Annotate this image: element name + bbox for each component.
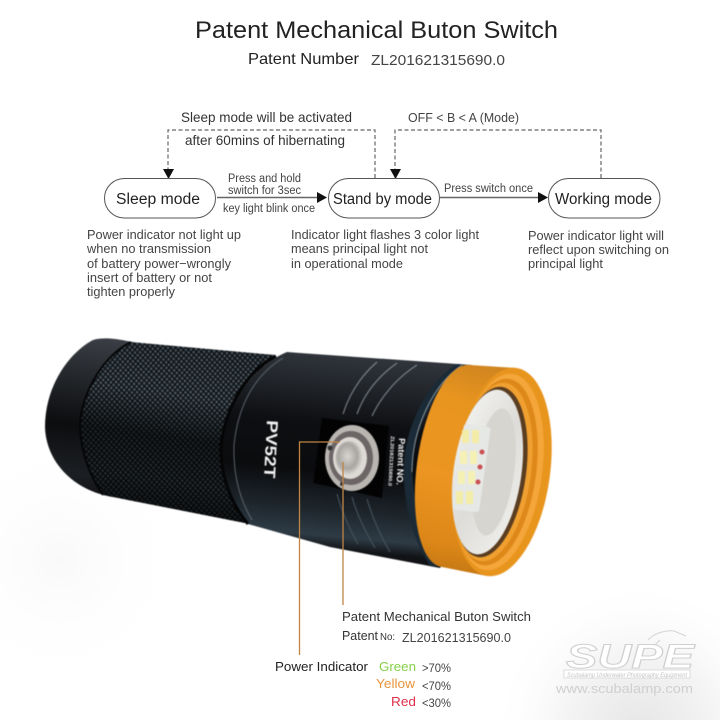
leader line: power indicator: [300, 442, 340, 655]
patent callout text: [342, 609, 531, 645]
text: stand by mode description: means principal light not: [291, 241, 428, 256]
arrow: sleep to stand by: [217, 173, 327, 215]
watermark logo: Scubalamp Underwater Photography Equipment: [567, 673, 687, 679]
patent label on body: Patent NO.: [395, 438, 407, 485]
patent callout text: Patent Mechanical Buton Switch: [342, 609, 531, 624]
mechanical button switch: [325, 425, 379, 491]
flashlight photo illustration: [45, 338, 564, 583]
text: sleep mode description: [86, 227, 241, 299]
sleep activation loop: Sleep mode will be activated: [181, 109, 352, 125]
patent number heading: [248, 51, 505, 69]
patent callout text: Patent: [342, 629, 379, 643]
power indicator legend: Red: [391, 694, 416, 709]
power indicator legend: >70%: [422, 663, 451, 675]
leader line: button switch: [342, 462, 344, 605]
tail cap: [45, 338, 140, 497]
patent number heading: Patent Number: [248, 51, 360, 68]
text: sleep mode description: of battery power−wrongly: [87, 256, 231, 271]
sleep activation loop: after 60mins of hibernating: [185, 132, 345, 148]
text: working mode description: principal light: [528, 256, 603, 271]
text: sleep mode description: tighten properly: [87, 284, 175, 299]
arrow: stand by to working: Press switch once: [444, 183, 533, 195]
watermark logo: SUPE: [566, 638, 696, 676]
text: stand by mode description: in operational mode: [291, 256, 403, 271]
patent callout text: No:: [380, 631, 395, 643]
text: working mode description: [528, 228, 669, 271]
title: Patent Mechanical Buton Switch: [195, 17, 558, 44]
sleep mode pill: Sleep mode: [116, 191, 200, 208]
arrow: sleep to stand by: switch for 3sec: [228, 185, 301, 197]
main body tube: [221, 352, 500, 568]
text: sleep mode description: when no transmission: [86, 241, 211, 256]
knurled grip: [80, 342, 275, 524]
arrow: stand by to working: [440, 183, 548, 203]
power indicator legend: [275, 659, 451, 710]
text: working mode description: Power indicator light will: [528, 228, 664, 243]
power indicator legend: <30%: [422, 698, 451, 710]
mode cycle loop: OFF < B < A (Mode): [408, 110, 519, 125]
patent callout text: ZL201621315690.0: [402, 630, 511, 645]
power indicator legend: Yellow: [376, 676, 416, 691]
stand by mode pill: Stand by mode: [333, 191, 432, 208]
patent number heading: ZL201621315690.0: [371, 53, 505, 69]
stand by mode pill: [328, 178, 440, 218]
lens and LEDs: [442, 385, 533, 559]
text: stand by mode description: [291, 227, 479, 271]
text: stand by mode description: Indicator light flashes 3 color light: [291, 227, 479, 242]
power indicator legend: <70%: [422, 681, 451, 693]
patent label on body: ZL201621315690.0: [386, 436, 395, 486]
text: sleep mode description: insert of battery or not: [87, 270, 212, 285]
working mode pill: Working mode: [555, 191, 652, 208]
orange bezel ring: [403, 360, 564, 583]
text: working mode description: reflect upon switching on: [528, 242, 669, 257]
patent label on body: [386, 436, 407, 486]
power indicator legend: Green: [379, 659, 416, 674]
sleep activation loop: [163, 109, 375, 179]
power indicator legend: Power Indicator: [275, 659, 369, 674]
watermark logo: [555, 631, 696, 696]
watermark logo: www.scubalamp.com: [555, 681, 693, 696]
arrow: sleep to stand by: Press and hold: [228, 173, 301, 185]
working mode pill: [548, 178, 660, 218]
arrow: sleep to stand by: key light blink once: [223, 203, 315, 215]
mode cycle loop: [390, 110, 601, 179]
model label: PV52T: [260, 420, 280, 479]
flow diagram: mode transitions: [104, 109, 660, 218]
switch label plate: [313, 418, 389, 498]
text: sleep mode description: Power indicator not light up: [87, 227, 241, 242]
sleep mode pill: [104, 178, 216, 218]
